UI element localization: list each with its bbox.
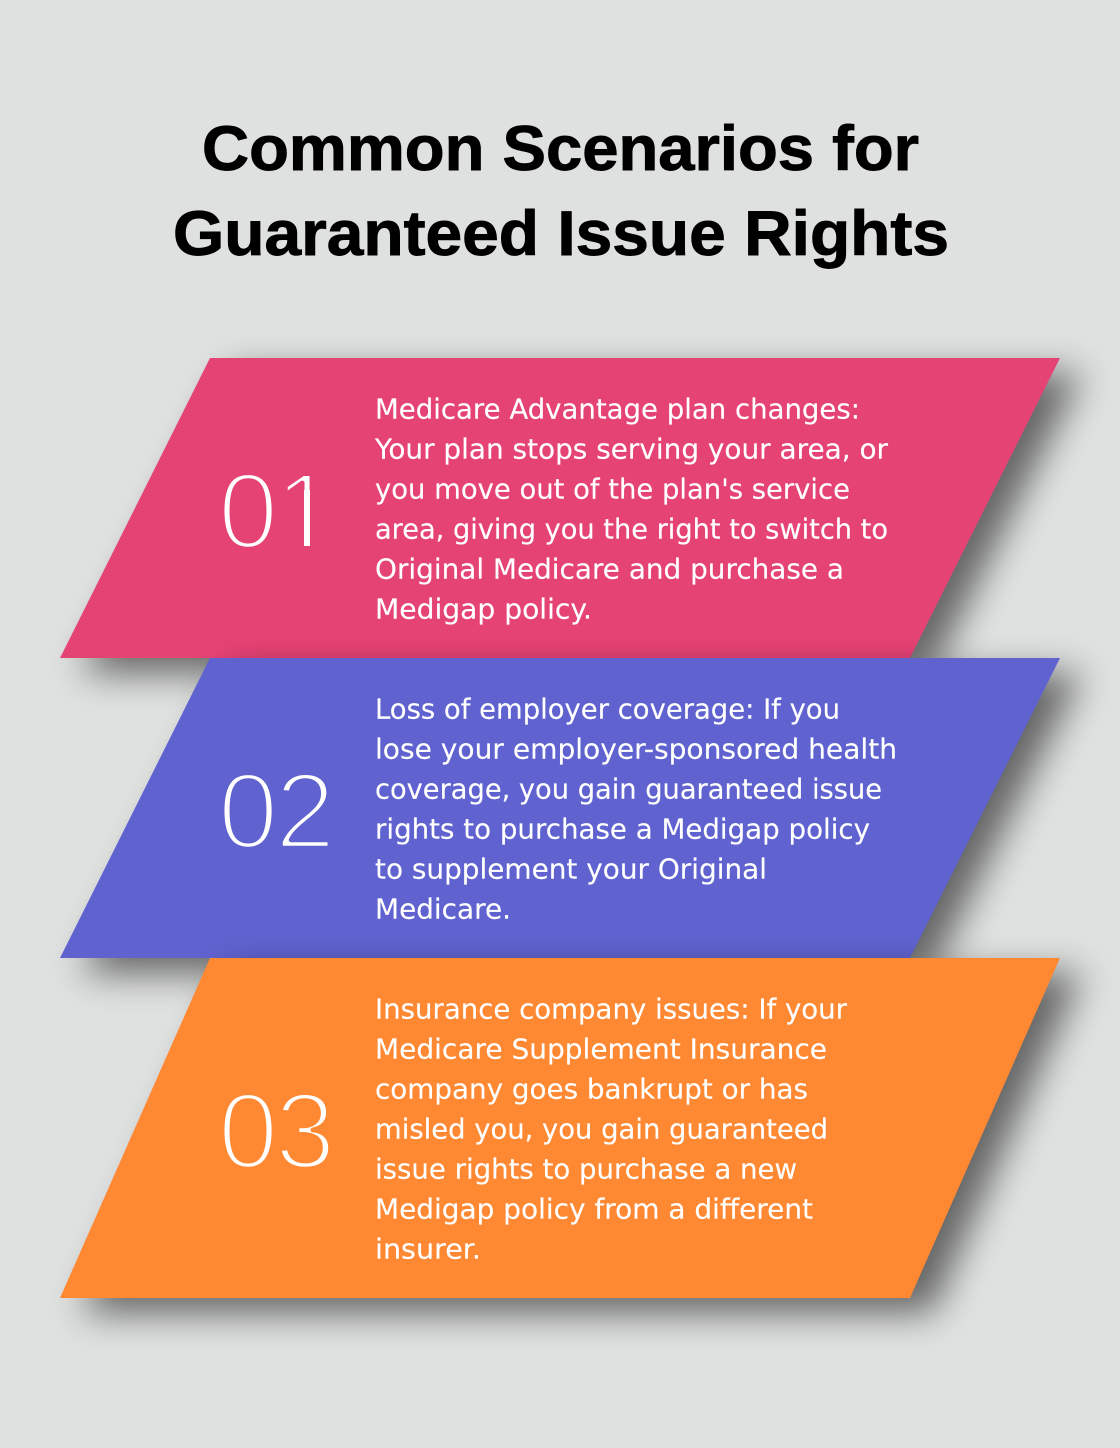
panel: scenario 03 bbox=[60, 958, 1082, 1313]
text: Loss of employer coverage bbox=[375, 692, 897, 926]
text: Loss of employer coverage: rights to purchase a Medigap policy bbox=[375, 812, 870, 846]
text: Insurance company issues: Medigap policy from a different bbox=[375, 1192, 813, 1226]
text: Insurance company issues: issue rights to purchase a new bbox=[375, 1152, 797, 1186]
text: Insurance company issues: misled you, you gain guaranteed bbox=[375, 1112, 828, 1146]
text: Insurance company issues: insurer. bbox=[375, 1232, 481, 1266]
text: Loss of employer coverage: coverage, you gain guaranteed issue bbox=[375, 772, 882, 806]
number 03: 03 bbox=[218, 1070, 332, 1191]
text: Medicare Advantage plan changes: you move out of the plan's service bbox=[375, 472, 850, 506]
panel: scenario 02 bbox=[60, 658, 1082, 973]
title: Common Scenarios for bbox=[202, 114, 919, 184]
panel shape: pink parallelogram bbox=[60, 358, 1060, 658]
text: Insurance company issues: Medicare Supplement Insurance bbox=[375, 1032, 827, 1066]
text: Medicare Advantage plan changes: Medicare Advantage plan changes: bbox=[375, 392, 860, 426]
number 01: 01 bbox=[218, 450, 332, 571]
title bbox=[173, 114, 949, 269]
panel: scenario 01 bbox=[60, 358, 1082, 673]
panel shape: blue parallelogram bbox=[60, 658, 1060, 958]
title: Guaranteed Issue Rights bbox=[173, 199, 949, 269]
text: Insurance company issues bbox=[375, 992, 847, 1266]
text: Insurance company issues: company goes bankrupt or has bbox=[375, 1072, 808, 1106]
text: Medicare Advantage plan changes: area, giving you the right to switch to bbox=[375, 512, 888, 546]
text: Loss of employer coverage: lose your employer-sponsored health bbox=[375, 732, 897, 766]
text: Medicare Advantage plan changes: Medigap policy. bbox=[375, 592, 592, 626]
text: Loss of employer coverage: Medicare. bbox=[375, 892, 511, 926]
panel shape: orange parallelogram bbox=[60, 958, 1060, 1298]
text: Loss of employer coverage: Loss of employer coverage: If you bbox=[375, 692, 840, 726]
text: Medicare Advantage plan changes bbox=[374, 392, 888, 626]
text: Medicare Advantage plan changes: Original Medicare and purchase a bbox=[375, 552, 844, 586]
text: Loss of employer coverage: to supplement your Original bbox=[375, 852, 767, 886]
text: Insurance company issues: Insurance company issues: If your bbox=[375, 992, 847, 1026]
text: Medicare Advantage plan changes: Your plan stops serving your area, or bbox=[374, 432, 888, 466]
number 02: 02 bbox=[218, 750, 332, 871]
